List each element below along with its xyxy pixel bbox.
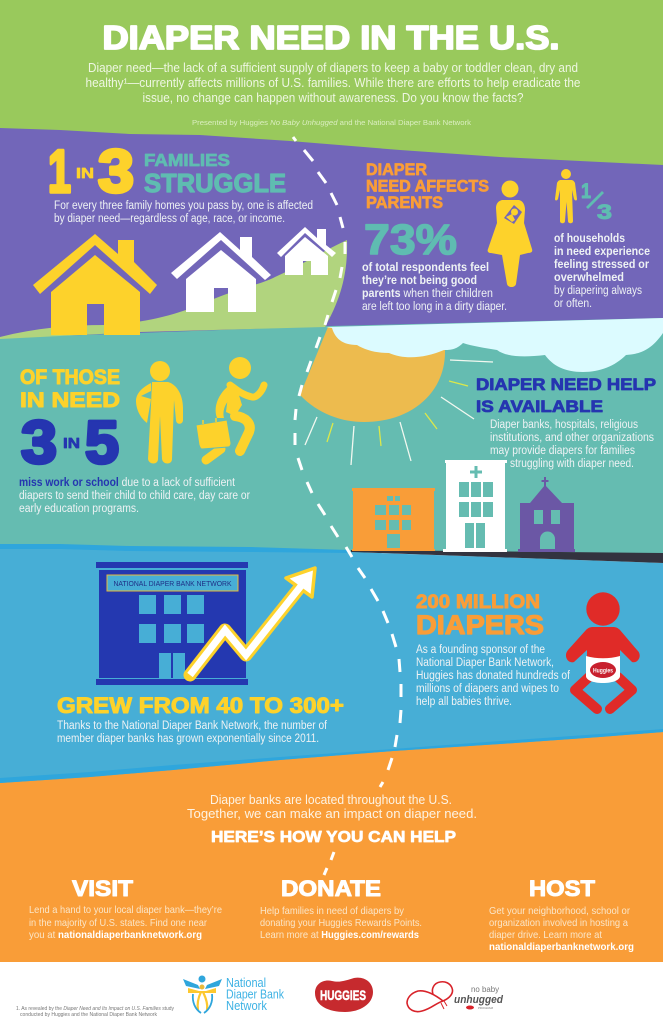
- text: growth description: member diaper banks has grown exponentially since 2011.: [57, 733, 319, 745]
- text: visit description: [29, 904, 222, 941]
- text: 73 percent description: are left too long in a dirty diaper.: [362, 301, 507, 313]
- text: help description: Diaper banks, hospitals, religious: [490, 419, 638, 431]
- icon: standing person: [555, 169, 577, 223]
- stat: 1 in 3: [48, 138, 134, 205]
- heading: donate: DONATE: [281, 876, 381, 901]
- footnote: conducted by Huggies and the National Diaper Bank Network: [20, 1012, 157, 1018]
- text: sponsor description: millions of diapers and wipes to: [416, 683, 559, 695]
- icon: small white house: [277, 227, 336, 275]
- text: help description: struggling with diaper need.: [510, 458, 634, 470]
- panel: host: [489, 876, 634, 953]
- text: one third description: in need experience: [554, 246, 650, 258]
- panel: visit: [29, 876, 222, 941]
- heading: diapers: DIAPERS: [416, 610, 544, 640]
- text: one third description: or often.: [554, 298, 592, 310]
- heading: host: HOST: [529, 876, 596, 901]
- heading: affects parents: DIAPER: [366, 161, 427, 179]
- text: visit description: you at nationaldiaperbanknetwork.org: [29, 929, 202, 941]
- text: diaper banks are located: [187, 793, 477, 821]
- panel: light green hill: [0, 240, 347, 339]
- icon: baby in diaper: [566, 592, 640, 709]
- heading: visit: VISIT: [72, 876, 134, 901]
- panel: teal section background: [0, 318, 663, 556]
- text: sponsor description: Huggies has donated hundreds of: [416, 670, 571, 682]
- logo: no baby unhugged: [407, 982, 503, 1012]
- text: one third description: of households: [554, 233, 625, 245]
- panel: 1 in 3 families: [33, 138, 336, 335]
- text: host description: Get your neighborhood, school or: [489, 905, 630, 917]
- text: help description: [490, 419, 654, 470]
- heading: help available: [476, 375, 656, 416]
- text: miss work or school: [19, 477, 250, 515]
- panel: purple section background: [0, 128, 663, 345]
- heading: of those in need: [20, 366, 120, 412]
- text: one third description: feeling stressed or: [554, 259, 649, 271]
- sun: [300, 327, 445, 422]
- text: growth description: [57, 720, 328, 745]
- panel: diaper need help is available: [352, 375, 656, 552]
- icon: yellow house: [33, 234, 157, 335]
- icon: purple church: [518, 477, 575, 552]
- panel: blue section background: [0, 545, 663, 790]
- panel: of those in need: [19, 357, 264, 515]
- text: diaper banks are located: Together, we can make an impact on diaper need.: [187, 807, 477, 821]
- text: host description: organization involved in hosting a: [489, 917, 628, 929]
- logo: huggies: HUGGIES: [320, 987, 366, 1003]
- arrow: growth: [190, 568, 315, 675]
- sun rays: [305, 360, 493, 465]
- heading: grew from 40 to 300+: GREW FROM 40 TO 300+: [57, 693, 344, 718]
- icon: white house: [171, 232, 271, 312]
- logo: no baby unhugged: PROGRAM: [478, 1006, 493, 1010]
- stat: 3 in 5: 3: [21, 409, 57, 476]
- stat: 1 in 3: IN: [76, 165, 94, 182]
- text: 73 percent description: [362, 262, 507, 313]
- sign: network name: NATIONAL DIAPER BANK NETWORK: [114, 581, 232, 588]
- text: 73 percent description: they’re not being good: [362, 275, 477, 287]
- panel: 200 million diapers: [416, 592, 640, 709]
- icon: baby in diaper: Huggies: [593, 668, 614, 674]
- stat: 1 in 3: 3: [98, 138, 134, 205]
- ground strip under buildings: [351, 550, 663, 563]
- stat: 1 in 3: 1: [48, 138, 71, 205]
- panel: diaper need affects parents: [362, 161, 650, 313]
- text: 73 percent description: of total respondents feel: [362, 262, 489, 274]
- text: donate description: Help families in need of diapers by: [260, 905, 405, 917]
- heading: 200 million: 200 MILLION: [416, 592, 540, 613]
- stat: 73 percent: 73%: [364, 216, 457, 264]
- decorative torn blue edge: [0, 544, 350, 553]
- text: visit description: in the majority of U.S. states. Find one near: [29, 917, 207, 929]
- logo: national diaper bank network: Diaper Bank: [226, 988, 285, 1002]
- logo: national diaper bank network: [183, 976, 285, 1013]
- text: one third description: [554, 233, 650, 310]
- text: struggle description: by diaper need—regardless of age, race, or income.: [54, 213, 285, 225]
- panel: national diaper bank network growth: [57, 562, 344, 745]
- text: sponsor description: As a founding sponsor of the: [416, 644, 545, 656]
- intro text: [86, 60, 580, 105]
- panel: white footer background: [0, 962, 663, 1024]
- heading: families struggle: STRUGGLE: [144, 168, 286, 198]
- text: miss work or school: miss work or school due to a lack of sufficient: [19, 477, 236, 489]
- intro text: Diaper need—the lack of a sufficient supply of diapers to keep a baby or toddler clean, dry and: [88, 60, 578, 75]
- heading: help available: IS AVAILABLE: [476, 397, 603, 416]
- heading: affects parents: [366, 161, 489, 212]
- text: growth description: Thanks to the National Diaper Bank Network, the number of: [57, 720, 328, 732]
- heading: affects parents: PARENTS: [366, 194, 443, 212]
- heading: of those in need: IN NEED: [20, 389, 120, 412]
- cloud: [326, 318, 663, 372]
- panel: orange section background: [0, 732, 663, 962]
- text: host description: nationaldiaperbanknetwork.org: [489, 941, 634, 953]
- presented by line: Presented by Huggies No Baby Unhugged and the National Diaper Bank Network: [192, 118, 471, 127]
- logo: national diaper bank network: Network: [226, 999, 268, 1013]
- intro text: issue, no change can happen without awareness. Do you know the facts?: [142, 90, 524, 105]
- heading: help available: DIAPER NEED HELP: [476, 375, 656, 394]
- logo: no baby unhugged: no baby: [471, 985, 499, 994]
- title: DIAPER NEED IN THE U.S.: [102, 19, 560, 56]
- text: one third description: overwhelmed: [554, 272, 624, 284]
- text: sponsor description: help all babies thrive.: [416, 696, 512, 708]
- text: struggle description: [54, 200, 313, 225]
- intro text: healthy¹—currently affects millions of U.S. families. While there are efforts to help eradicate the: [86, 75, 580, 90]
- heading: of those in need: OF THOSE: [20, 366, 120, 389]
- text: donate description: [260, 905, 422, 941]
- heading: families struggle: [144, 150, 286, 198]
- icon: student with backpack: [136, 361, 183, 464]
- text: one third description: by diapering always: [554, 285, 642, 297]
- logo: national diaper bank network: National: [226, 976, 266, 990]
- text: host description: [489, 905, 634, 953]
- decorative torn orange edge: [0, 729, 663, 783]
- text: sponsor description: [416, 644, 571, 708]
- text: host description: diaper drive. Learn more at: [489, 929, 602, 941]
- text: 73 percent description: parents when their children: [362, 288, 493, 300]
- icon: white hospital: [443, 460, 507, 552]
- stat: 3 in 5: 5: [85, 409, 119, 476]
- heading: here's how you can help: HERE’S HOW YOU CAN HELP: [211, 829, 456, 846]
- text: struggle description: For every three family homes you pass by, one is affected: [54, 200, 313, 212]
- heading: families struggle: FAMILIES: [144, 150, 230, 170]
- stat: 3 in 5: [21, 409, 119, 476]
- text: miss work or school: diapers to send their child to child care, day care or: [19, 490, 250, 502]
- footnote: 1. As revealed by the Diaper Need and Its Impact on U.S. Families study: [16, 1006, 174, 1012]
- icon: woman holding baby: [488, 180, 532, 287]
- stat: one third: 1: [581, 180, 591, 203]
- text: visit description: Lend a hand to your local diaper bank—they’re: [29, 904, 222, 916]
- text: miss work or school: early education programs.: [19, 503, 139, 515]
- logo: huggies: [315, 978, 373, 1012]
- text: diaper banks are located: Diaper banks are located throughout the U.S.: [210, 793, 452, 807]
- icon: orange diaper bank building: [352, 488, 435, 551]
- icon: network building: [96, 562, 248, 685]
- footnote: [16, 1006, 174, 1018]
- text: sponsor description: National Diaper Bank Network,: [416, 657, 554, 669]
- panel: green header background: [0, 0, 663, 240]
- icon: running person with briefcase: [196, 357, 264, 460]
- heading: affects parents: NEED AFFECTS: [366, 178, 489, 196]
- text: help description: may provide diapers for families: [490, 445, 635, 457]
- logo: no baby unhugged: unhugged: [454, 994, 503, 1006]
- stat: one third: 3: [597, 201, 612, 224]
- text: donate description: donating your Huggies Rewards Points.: [260, 917, 422, 929]
- stat: 3 in 5: IN: [63, 435, 80, 452]
- panel: donate: [260, 876, 422, 941]
- stat: one third: [581, 180, 612, 224]
- sign: network name: [107, 575, 238, 591]
- dashed path: [293, 137, 401, 875]
- text: donate description: Learn more at Huggies.com/rewards: [260, 929, 419, 941]
